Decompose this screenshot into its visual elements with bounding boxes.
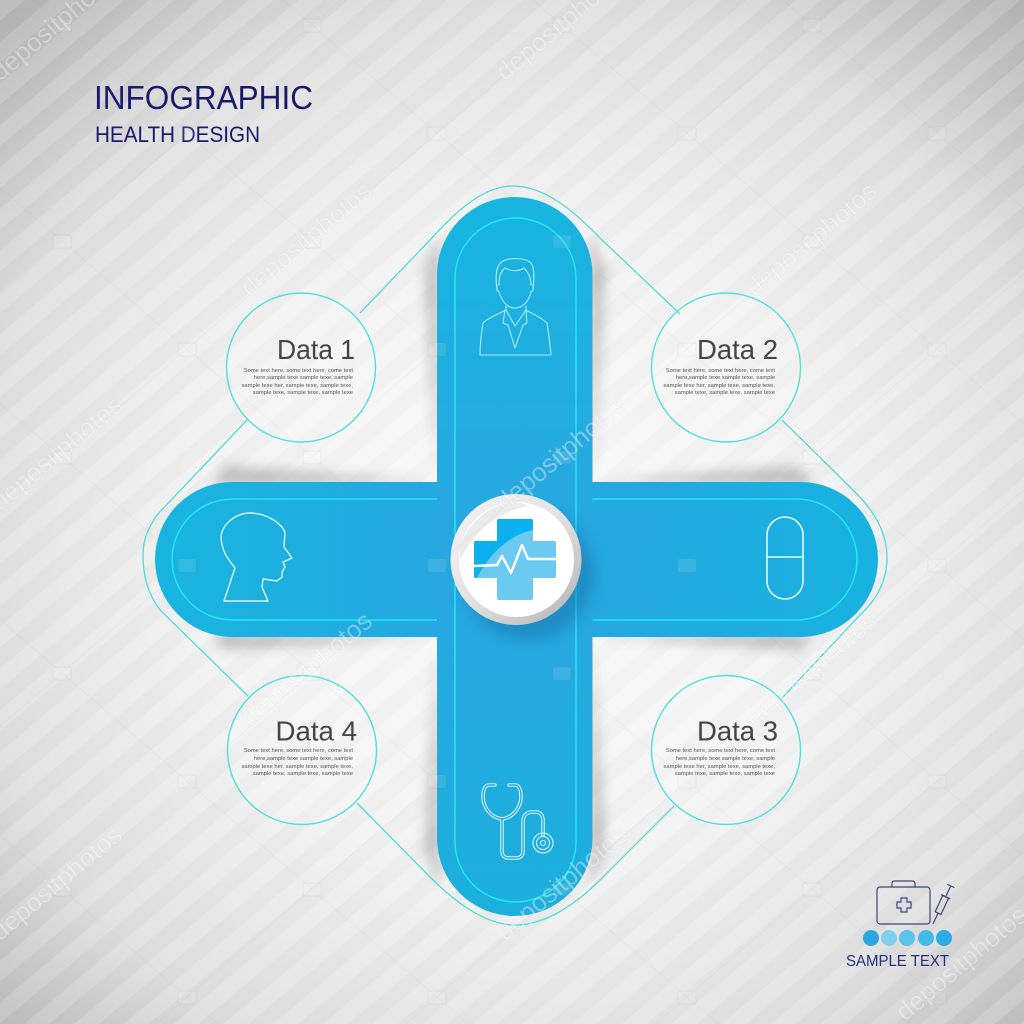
data circle 4: Data 4: [276, 716, 357, 746]
data circle 2: sample texe her, sample texe, sample texe,: [664, 383, 775, 389]
icon: doctor: [480, 259, 551, 355]
data circle 3: Some text here, some text here, come text: [666, 748, 775, 754]
data circle 1: Some text here, some text here, come text: [244, 368, 353, 374]
title: [94, 79, 313, 147]
data circle 3: here,sample texe sample texe, sample: [676, 756, 775, 762]
data circle 4: Some text here, some text here, come text: [244, 748, 353, 754]
horizontal bar: [155, 482, 878, 637]
vertical bar: [437, 197, 592, 916]
watermarks: depositphotos: [490, 820, 633, 947]
data circle 3: [652, 676, 800, 824]
title: INFOGRAPHIC: [94, 79, 313, 116]
sample text label: SAMPLE TEXT: [846, 953, 949, 970]
icon: capsule: [767, 517, 803, 599]
outer rounded diamond outline: [143, 186, 887, 925]
data circle 2: here,sample texe sample texe, sample: [676, 375, 775, 381]
data circle 2: Data 2: [697, 334, 778, 365]
icon: stethoscope: [483, 785, 553, 858]
data circle 3: sample texe, sample texe, sample texe: [675, 771, 775, 777]
center medical badge: [450, 494, 594, 640]
data circle 4: [228, 676, 376, 824]
icon: medical cross: [474, 519, 556, 600]
data circle 1: sample texe, sample texe, sample texe: [253, 390, 353, 396]
watermarks: depositphotos: [740, 176, 883, 303]
watermarks: depositphotos: [740, 606, 883, 733]
horizontal bar shadows: [213, 466, 812, 650]
data circle 1: sample texe her, sample texe, sample texe,: [242, 383, 353, 389]
data circle 2: [652, 293, 800, 442]
vertical bar shadows: [425, 235, 605, 885]
data circle 1: Data 1: [277, 334, 355, 365]
watermarks: depositphotos: [235, 176, 378, 303]
title: HEALTH DESIGN: [95, 122, 260, 147]
icon: medical kit and syringe: [877, 881, 955, 926]
data circle 4: here,sample texe sample texe, sample: [254, 756, 353, 762]
data circle 3: Data 3: [697, 716, 778, 746]
data circle 2: Some text here, some text here, come text: [666, 368, 775, 374]
data circle 4: sample texe, sample texe, sample texe: [253, 771, 353, 777]
icon: head profile: [221, 513, 292, 601]
progress dots: [863, 930, 952, 946]
data circle 3: sample texe her, sample texe, sample texe,: [664, 764, 775, 770]
watermarks: depositphotos: [490, 390, 633, 517]
watermarks: depositphotos: [235, 606, 378, 733]
data circle 2: sample texe, sample texe, sample texe: [675, 390, 775, 396]
data circle 1: here,sample texe sample texe, sample: [254, 375, 353, 381]
data circle 4: sample texe her, sample texe, sample texe,: [242, 764, 353, 770]
data circle 1: [226, 293, 376, 442]
